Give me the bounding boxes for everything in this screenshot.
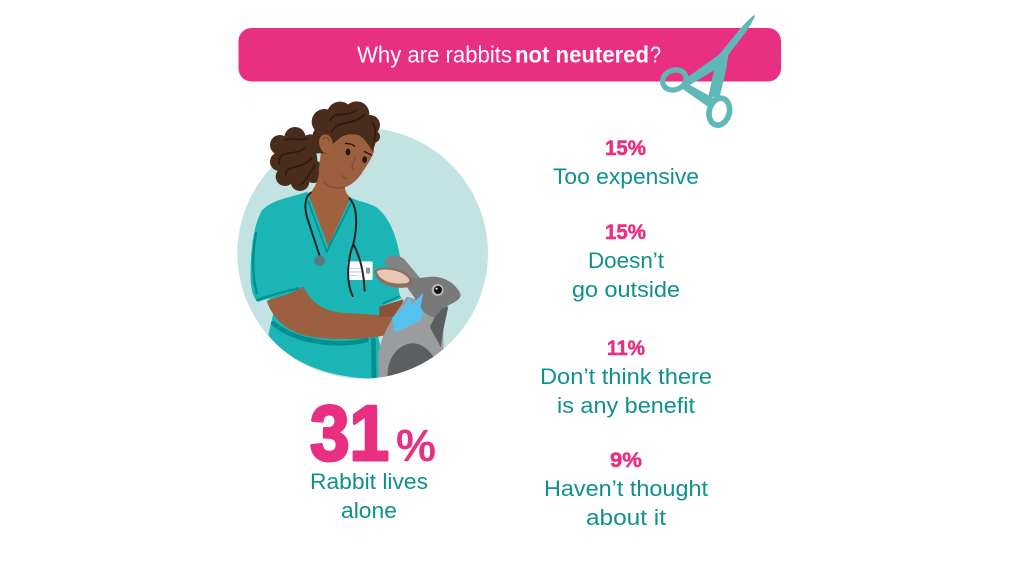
arm [267, 287, 395, 339]
scrub top [251, 192, 402, 379]
stat: rabbit lives alone: alone [341, 498, 397, 523]
stat: too expensive: Too expensive [553, 164, 699, 189]
stat: doesn't go outside: go outside [572, 277, 680, 302]
stat: doesn't go outside: Doesn’t [588, 248, 664, 273]
rabbit back ear [384, 255, 420, 278]
front hair [312, 101, 380, 153]
hair waves [279, 110, 376, 184]
stat: haven't thought: about it [586, 505, 666, 530]
id badge [347, 261, 373, 280]
hair bun [270, 127, 325, 191]
title text: not neutered [515, 42, 649, 68]
stat: rabbit lives alone [310, 389, 436, 523]
stat: no benefit: 11% [607, 337, 645, 360]
background circle [237, 128, 488, 379]
title text: ? [650, 42, 661, 68]
rabbit [374, 255, 461, 380]
percent sign: % [396, 420, 436, 471]
stat: haven't thought [544, 449, 708, 530]
neck [309, 172, 350, 246]
stat: no benefit [540, 337, 712, 418]
blue glove [392, 293, 423, 333]
eyes and face lines [323, 143, 372, 188]
stat: no benefit: is any benefit [557, 393, 695, 418]
stat: too expensive: 15% [605, 137, 646, 160]
icon: surgical scissors [660, 15, 755, 127]
stat: haven't thought: Haven’t thought [544, 476, 708, 501]
ear [319, 134, 333, 153]
rabbit head [407, 277, 461, 317]
rabbit ear [374, 267, 413, 288]
stethoscope [305, 193, 365, 296]
scrub shading [253, 202, 398, 377]
stat: doesn't go outside [572, 221, 680, 302]
caption: Rabbit lives [310, 469, 428, 494]
title banner [238, 28, 781, 82]
stat: too expensive [553, 137, 699, 189]
title text: Why are rabbits [357, 42, 512, 68]
face [318, 134, 374, 188]
stat: doesn't go outside: 15% [605, 221, 646, 244]
rabbit body [378, 297, 447, 380]
stat: haven't thought: 9% [610, 449, 642, 472]
big number: 31 [310, 389, 389, 477]
rabbit eye [432, 284, 444, 296]
illustration: vet holding rabbit [237, 101, 488, 380]
stat: no benefit: Don’t think there [540, 364, 712, 389]
